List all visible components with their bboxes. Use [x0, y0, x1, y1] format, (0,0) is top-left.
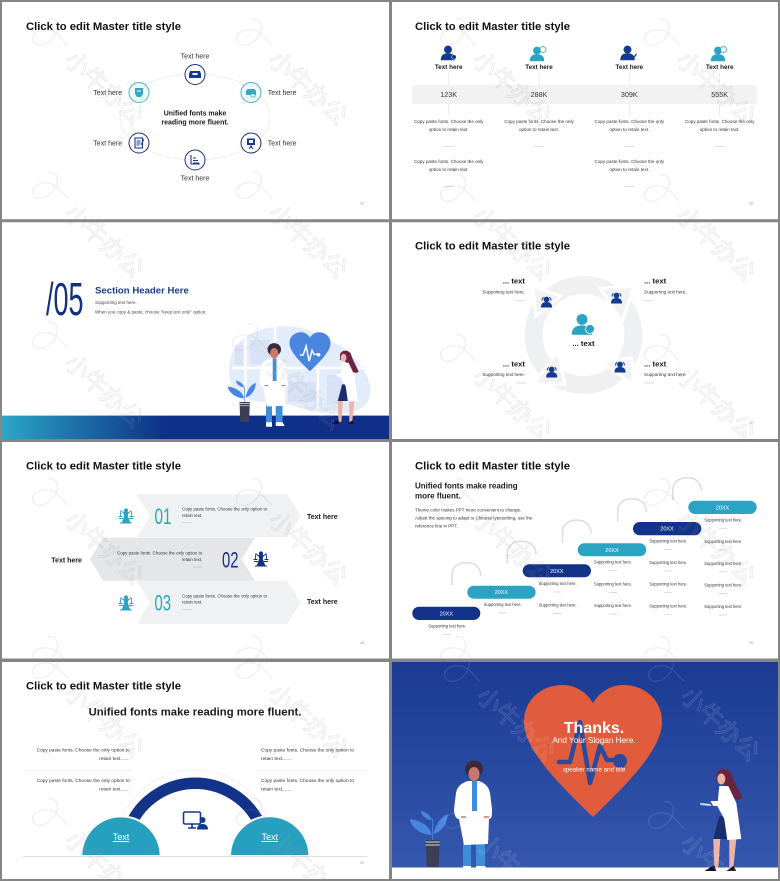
node labels: Text here	[181, 176, 210, 182]
pulse line	[559, 722, 627, 783]
slide 8: thanks closing	[392, 662, 778, 879]
step supporting text: Supporting text here.	[428, 623, 466, 628]
cycle supporting text: Supporting text here.	[482, 372, 525, 377]
slide 2 title: Click to edit Master title style	[415, 21, 570, 33]
slide 1 title: Click to edit Master title style	[26, 21, 181, 33]
cycle labels: ... text	[644, 277, 667, 286]
slide 4 title: Click to edit Master title style	[415, 241, 570, 253]
plant	[410, 811, 448, 867]
arrowhead top right	[600, 286, 634, 322]
supporting text: Supporting text here.	[95, 300, 137, 305]
icon: scale figure 03	[118, 596, 134, 610]
cycle ring	[534, 285, 634, 385]
icon: person navy check	[621, 46, 636, 60]
speaker line: speaker name and title	[563, 766, 626, 774]
slide 5: chevron list	[2, 442, 389, 658]
slide 7 title: Click to edit Master title style	[26, 681, 181, 693]
column descriptions: Copy paste fonts. Choose the only	[595, 159, 665, 164]
cycle supporting text: Supporting text here.	[644, 372, 687, 377]
slide 2: four column metrics	[392, 2, 778, 220]
cycle labels: ... text	[503, 277, 525, 286]
pill year labels	[440, 505, 730, 617]
right notes: retain text.......	[261, 756, 291, 762]
step supporting text: Supporting text here.	[649, 538, 687, 543]
column descriptions: Copy paste fonts. Choose the only	[504, 119, 574, 124]
column headings: Text here	[435, 64, 463, 71]
illustration backdrop	[229, 325, 370, 416]
column descriptions: option to retain text.	[700, 127, 740, 132]
step supporting text: Supporting text here.	[484, 602, 522, 607]
node labels: Text here	[181, 54, 210, 60]
cycle supporting text	[482, 290, 687, 377]
chevron 01: Copy paste fonts. Choose the only option to	[182, 506, 268, 511]
icon: person navy	[441, 46, 456, 60]
step supporting text: Supporting text here.	[539, 581, 577, 586]
female doctor	[328, 351, 359, 424]
page number: 28	[360, 641, 364, 645]
metrics band	[412, 85, 757, 104]
right notes: retain text.......	[261, 787, 291, 793]
supporting text	[95, 300, 207, 314]
slide 7 subtitle: Unified fonts make reading more fluent.	[89, 707, 301, 719]
chevron 01: retain text.	[182, 513, 202, 518]
step supporting text: Supporting text here.	[704, 561, 742, 566]
page number: 27	[749, 421, 753, 425]
step supporting text: Supporting text here.	[539, 602, 577, 608]
step supporting text: Supporting text here.	[594, 603, 632, 608]
metric values: 309K	[621, 90, 638, 99]
icon: person teal badge	[711, 46, 726, 61]
node labels: Text here	[93, 141, 122, 148]
icon: people top right	[612, 293, 622, 303]
column descriptions: Copy paste fonts. Choose the only	[685, 119, 755, 124]
side labels: Text here	[51, 558, 82, 565]
node labels: Text here	[268, 141, 297, 148]
chevron 02: Copy paste fonts. Choose the only option to	[117, 551, 203, 556]
left notes: Copy paste fonts. Choose the only option to	[37, 778, 130, 784]
step supporting text: Supporting text here.	[704, 517, 742, 522]
slide 3: section header	[2, 222, 389, 439]
column descriptions: option to retain text.	[429, 127, 469, 132]
chevron 02	[90, 538, 255, 581]
icon: presentation, lower right	[241, 133, 261, 153]
central statement: reading more fluent.	[161, 119, 229, 126]
left dome: Text	[113, 832, 130, 842]
cycle supporting text: Supporting text here.	[644, 290, 687, 294]
column descriptions: Copy paste fonts. Choose the only	[414, 119, 484, 124]
pill year labels: 20XX	[440, 611, 453, 617]
chevron 03: 03	[154, 591, 171, 616]
slogan: And Your Slogan Here.	[552, 736, 636, 745]
column descriptions: Copy paste fonts. Choose the only	[414, 159, 484, 164]
thanks heading: Thanks.	[564, 720, 624, 737]
chevron 01: 01	[154, 504, 172, 529]
step supporting text: Supporting text here.	[649, 560, 687, 565]
slide 6 title: Click to edit Master title style	[415, 461, 570, 473]
step supporting text: Supporting text here.	[704, 582, 742, 588]
cycle labels	[503, 277, 667, 368]
step supporting text: Supporting text here.	[704, 539, 742, 544]
section heading: Section Header Here	[95, 285, 189, 296]
central label: ... text	[572, 339, 595, 348]
icon: people top left	[542, 297, 552, 307]
icon: badge, upper left	[129, 82, 149, 102]
metric values: 288K	[531, 90, 548, 99]
left notes: retain text.......	[99, 756, 130, 762]
icon: central person with coin	[572, 314, 594, 335]
pill year labels: 20XX	[716, 505, 730, 511]
column descriptions: option to retain text.	[519, 127, 559, 132]
slide 1: circular topic diagram	[2, 2, 389, 220]
arch	[120, 770, 270, 822]
slide 6: stepped timeline	[392, 442, 778, 658]
column headings: Text here	[706, 64, 734, 71]
arrowhead top left	[533, 286, 561, 316]
cycle labels: ... text	[644, 359, 667, 368]
slide 5 title: Click to edit Master title style	[26, 461, 181, 473]
right dome: Text	[261, 832, 278, 842]
ground line	[23, 856, 368, 858]
node labels: Text here	[93, 90, 122, 97]
step connector arcs	[452, 478, 702, 585]
column headings: Text here	[525, 64, 553, 71]
icon: notepad, lower left	[129, 133, 149, 153]
page number: 30	[360, 861, 364, 865]
pill year labels: 20XX	[660, 527, 674, 533]
side labels	[51, 514, 338, 606]
connector lines	[449, 73, 720, 115]
slide 7: arch diagram	[2, 662, 389, 879]
metric values	[440, 90, 728, 99]
chevron 02: 02	[222, 547, 238, 572]
pill year labels: 20XX	[605, 548, 619, 554]
column headings	[435, 64, 734, 71]
left dome	[81, 816, 161, 856]
arrowhead bottom right	[601, 358, 633, 384]
icon: bar list, bottom	[185, 150, 205, 170]
icon: people bottom left	[547, 367, 557, 377]
icon: monitor with user	[184, 812, 208, 830]
metric values: 555K	[711, 90, 728, 99]
cycle labels: ... text	[503, 359, 525, 368]
column descriptions	[414, 119, 755, 172]
gradient floor band	[2, 416, 389, 439]
chevron 03	[137, 581, 301, 624]
slide 6 heading: Unified fonts make reading	[415, 482, 518, 491]
page number: 25	[749, 202, 753, 206]
slide 4: cycle diagram	[392, 222, 778, 439]
central statement: Unified fonts make	[164, 110, 226, 117]
year pills	[412, 501, 757, 620]
step supporting text: Supporting text here.	[649, 582, 687, 587]
column descriptions: option to retain text.	[609, 127, 649, 132]
column descriptions: option to retain text.	[429, 167, 469, 172]
cycle supporting text: Supporting text here.	[482, 290, 525, 294]
right notes: Copy paste fonts. Choose the only option to	[261, 778, 354, 784]
column descriptions: option to retain text.	[609, 167, 649, 172]
section number: /05	[46, 273, 84, 325]
page number: 26	[360, 202, 364, 206]
column headings: Text here	[616, 64, 644, 71]
icon: building, top	[185, 64, 205, 84]
step supporting text	[428, 517, 742, 628]
male doctor	[454, 760, 492, 872]
chevron 02: retain text.	[182, 557, 202, 562]
right dome	[230, 816, 309, 856]
step supporting text: Supporting text here.	[704, 604, 742, 609]
chevron 03: Copy paste fonts. Choose the only option to	[182, 593, 268, 598]
slide 6 body text: reference line in PPT.	[415, 524, 458, 528]
side labels: Text here	[307, 514, 338, 521]
plant	[228, 381, 256, 422]
pill year labels: 20XX	[495, 590, 508, 596]
step supporting text: Supporting text here.	[649, 603, 687, 608]
chevron 03: retain text.	[182, 600, 202, 605]
node labels: Text here	[268, 90, 297, 97]
icon: people bottom right	[615, 362, 625, 372]
left notes: retain text.......	[99, 787, 130, 793]
slide 6 heading: more fluent.	[415, 492, 461, 501]
step supporting text: Supporting text here.	[594, 581, 632, 586]
icon: person teal	[530, 46, 546, 61]
chevron 01	[137, 494, 301, 537]
column descriptions: Copy paste fonts. Choose the only	[595, 119, 665, 124]
step supporting text: Supporting text here.	[594, 560, 632, 565]
side labels: Text here	[307, 599, 338, 606]
orbit ellipse	[120, 74, 270, 160]
left notes: Copy paste fonts. Choose the only option to	[37, 747, 130, 753]
metric values: 123K	[440, 90, 457, 99]
slide 6 body text: Adjust the spacing to adapt to Chinese typesetting, use the	[415, 516, 533, 520]
pill year labels: 20XX	[550, 569, 564, 575]
slide 6 body text: Theme color makes PPT more convenient to change.	[415, 508, 521, 513]
female doctor	[700, 769, 742, 871]
page number: 29	[749, 641, 753, 645]
large heart	[524, 685, 662, 817]
arrowhead bottom left	[533, 352, 565, 384]
heart with pulse	[290, 332, 330, 371]
male doctor	[259, 343, 288, 427]
right notes: Copy paste fonts. Choose the only option to	[261, 747, 354, 753]
supporting text: When you copy & paste, choose "keep text only" option.	[95, 310, 207, 314]
node labels	[93, 54, 297, 182]
icon: scale figure 02	[254, 552, 268, 566]
icon: cloud, upper right	[241, 82, 261, 102]
icon: scale figure 01	[118, 509, 134, 523]
